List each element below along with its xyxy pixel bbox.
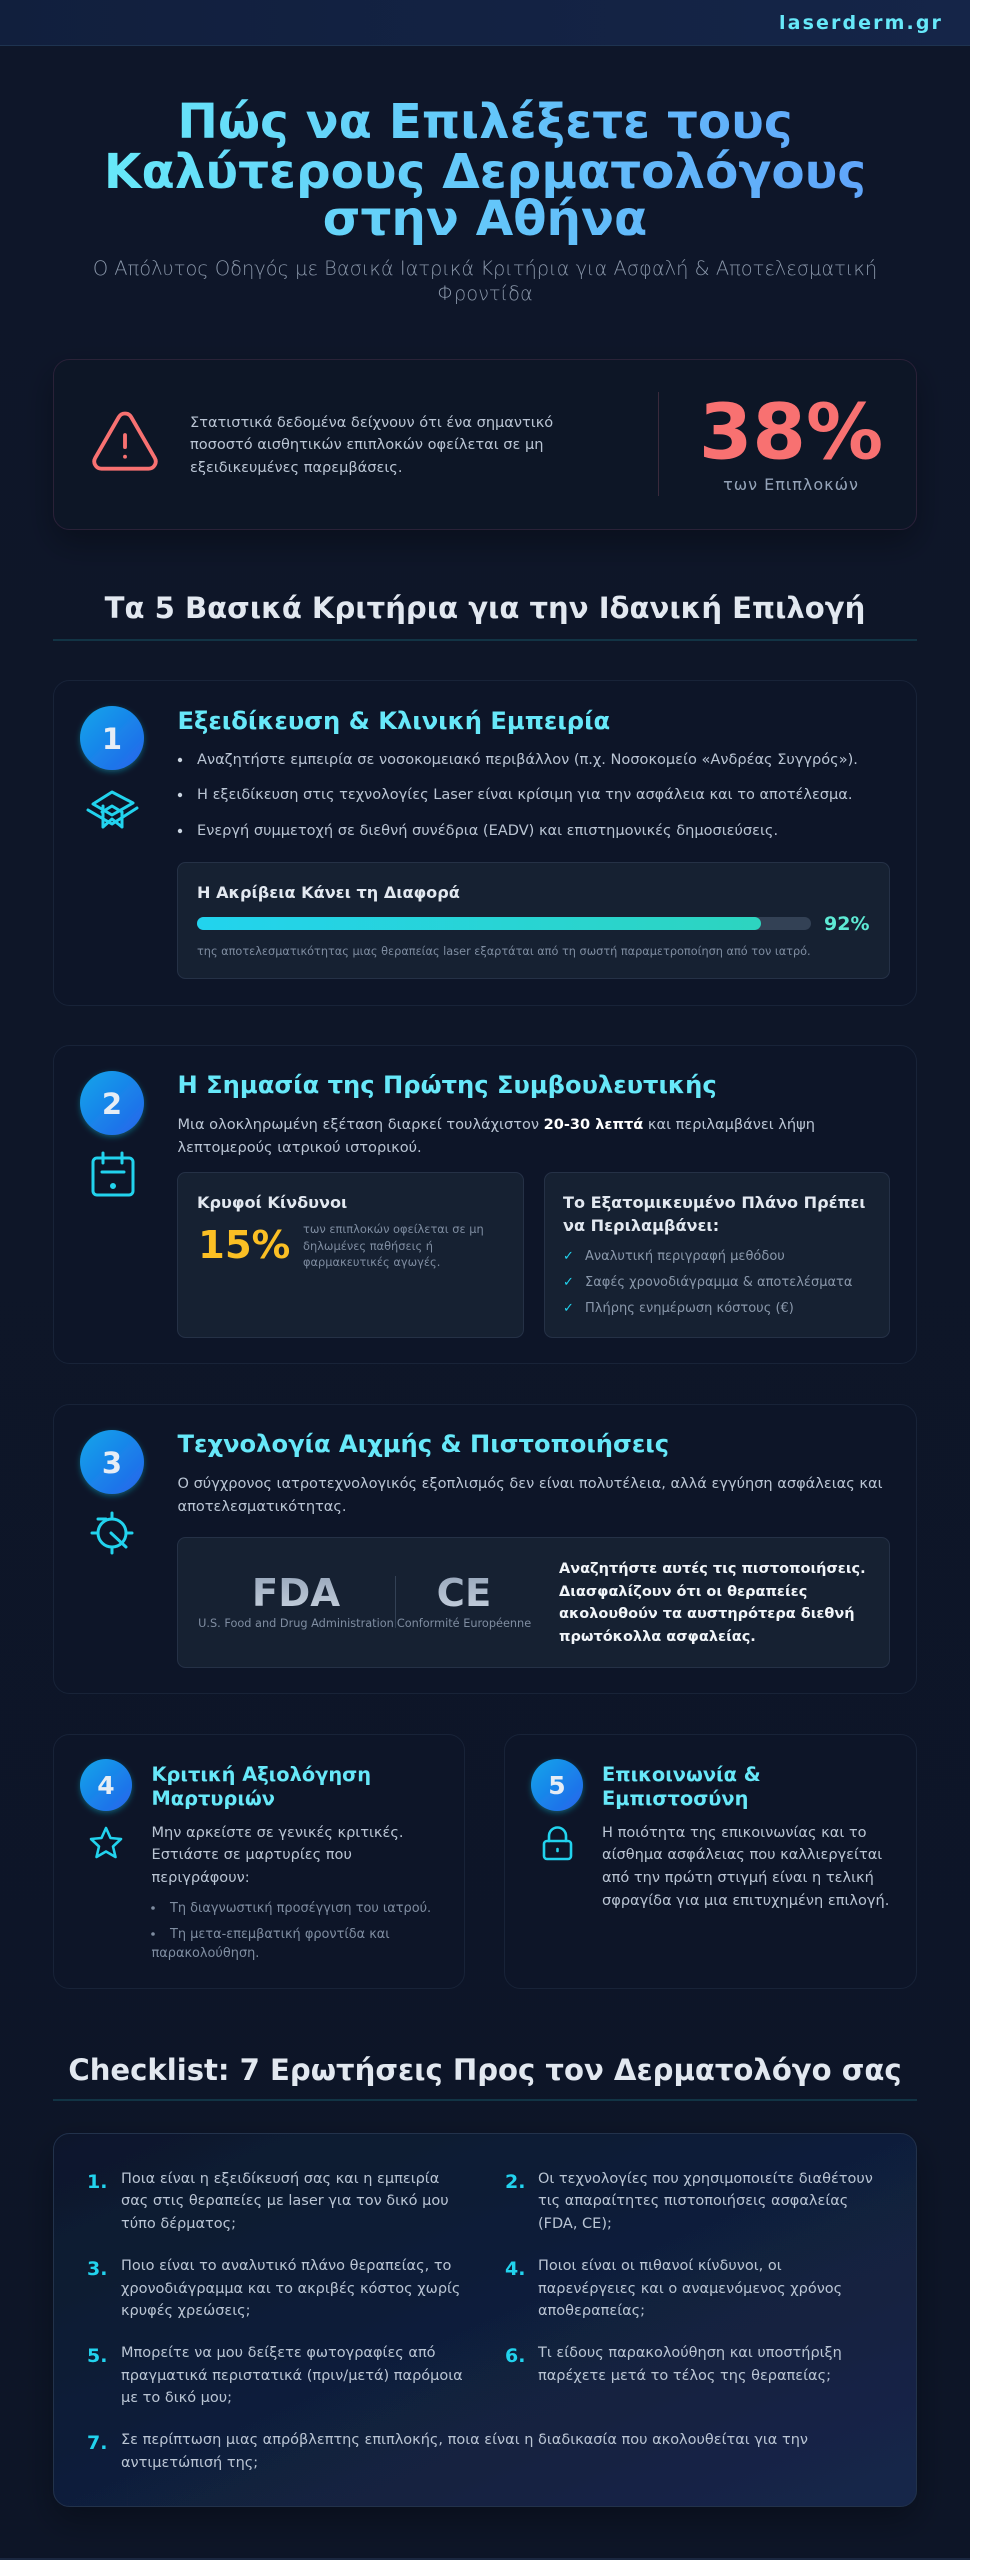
section heading: criteria: Τα 5 Βασικά Κριτήρια για την Ιδανική Επιλογή — [105, 591, 865, 625]
callout: personalised plan — [544, 1172, 890, 1338]
icon: calendar — [93, 1153, 133, 1195]
question 1: 1. — [87, 2171, 107, 2193]
body text: περιγράφουν: — [152, 1869, 250, 1886]
paragraph: Ο σύγχρονος ιατροτεχνολογικός εξοπλισμός δεν είναι πολυτέλεια, αλλά εγγύηση ασφάλειας και — [178, 1475, 883, 1492]
alert text: Στατιστικά δεδομένα δείχνουν ότι ένα σημαντικό — [190, 414, 553, 431]
panel: criterion 5 — [504, 1734, 916, 1988]
number badge 1: 1 — [102, 722, 122, 756]
bullet list: Ενεργή συμμετοχή σε διεθνή συνέδρια (EADV) και επιστημονικές δημοσιεύσεις. — [197, 822, 778, 839]
paragraph — [178, 1475, 883, 1515]
callout: hidden risks: 15% — [198, 1223, 290, 1268]
body text: από την πρώτη στιγμή είναι η τελική — [602, 1869, 874, 1886]
number badge 2: 2 — [102, 1087, 122, 1121]
panel: criterion 3 — [54, 1404, 916, 1694]
question 3: 3. — [87, 2258, 107, 2280]
certification note: Διασφαλίζουν ότι οι θεραπείες — [559, 1584, 807, 1600]
heading: Μαρτυριών — [152, 1787, 275, 1810]
heading: Κριτική Αξιολόγηση — [152, 1763, 371, 1786]
callout: personalised plan: Αναλυτική περιγραφή μεθόδου — [585, 1249, 785, 1264]
question 6 — [505, 2345, 842, 2384]
title — [104, 94, 866, 247]
stat caption: των Επιπλοκών — [723, 475, 859, 494]
panel: criterion 1 — [54, 680, 916, 1006]
question 6: Τι είδους παρακολούθηση και υποστήριξη — [537, 2345, 842, 2361]
number badge 3: 3 — [102, 1446, 122, 1480]
paragraph: Μια ολοκληρωμένη εξέταση διαρκεί τουλάχιστον 20-30 λεπτά και περιλαμβάνει λήψη — [178, 1116, 815, 1133]
callout: personalised plan: Πλήρης ενημέρωση κόστους (€) — [585, 1301, 794, 1316]
number badge 5 — [531, 1759, 583, 1811]
panel: alert statistic — [54, 360, 916, 530]
question 1: σας στις θεραπείες με laser για τον δικό μου — [121, 2193, 449, 2209]
subtitle — [93, 257, 877, 305]
question 2: (FDA, CE); — [538, 2216, 612, 2232]
heading: Επικοινωνία & — [602, 1763, 761, 1786]
bullet list — [178, 751, 858, 839]
question 2: τις απαραίτητες πιστοποιήσεις ασφαλείας — [538, 2193, 848, 2209]
CE badge: CE — [437, 1571, 491, 1616]
question 2: 2. — [505, 2171, 525, 2193]
question 4: παρενέργειες και ο αναμενόμενος χρόνος — [538, 2281, 842, 2297]
callout: personalised plan: ✓ — [563, 1301, 574, 1316]
number badge 5: 5 — [548, 1771, 566, 1800]
body text: αίσθημα ασφάλειας που καλλιεργείται — [602, 1846, 882, 1863]
heading: Η Σημασία της Πρώτης Συμβουλευτικής — [178, 1071, 717, 1099]
icon: graduation cap — [88, 792, 137, 827]
question 7 — [87, 2432, 808, 2471]
question 5: Μπορείτε να μου δείξετε φωτογραφίες από — [121, 2345, 436, 2361]
body text — [602, 1824, 889, 1909]
certification note: Αναζητήστε αυτές τις πιστοποιήσεις. — [559, 1561, 866, 1577]
heading — [152, 1763, 371, 1810]
callout: hidden risks: φαρμακευτικές αγωγές. — [303, 1255, 440, 1269]
paragraph — [178, 1116, 815, 1156]
number badge 3 — [80, 1430, 144, 1494]
subtitle: Ο Απόλυτος Οδηγός με Βασικά Ιατρικά Κριτήρια για Ασφαλή & Αποτελεσματική — [93, 257, 877, 280]
FDA badge: U.S. Food and Drug Administration — [198, 1617, 394, 1630]
icon: padlock — [544, 1828, 571, 1859]
sub-bullets: Τη μετα-επεμβατική φροντίδα και — [169, 1927, 390, 1942]
question 2 — [505, 2171, 873, 2232]
question 7: Σε περίπτωση μιας απρόβλεπτης επιπλοκής, ποια είναι η διαδικασία που ακολουθείται για την — [121, 2432, 808, 2448]
icon: crosshair gear — [92, 1513, 132, 1553]
callout: personalised plan: ✓ — [563, 1275, 574, 1290]
heading — [602, 1763, 761, 1810]
question 7: 7. — [87, 2432, 107, 2454]
question 1: Ποια είναι η εξειδίκευσή σας και η εμπειρία — [121, 2171, 439, 2187]
sub-bullets — [151, 1901, 431, 1961]
bullet list: Η εξειδίκευση στις τεχνολογίες Laser είναι κρίσιμη για την ασφάλεια και το αποτέλεσμα. — [197, 786, 852, 803]
sub-bullets: Τη διαγνωστική προσέγγιση του ιατρού. — [169, 1901, 431, 1916]
body text: Μην αρκείστε σε γενικές κριτικές. — [152, 1824, 404, 1841]
icon: star — [91, 1828, 121, 1857]
big number 38%: 38% — [699, 388, 883, 478]
bullet list: Αναζητήστε εμπειρία σε νοσοκομειακό περιβάλλον (π.χ. Νοσοκομείο «Ανδρέας Συγγρός»). — [197, 751, 858, 768]
section heading: checklist: Checklist: 7 Ερωτήσεις Προς τον Δερματολόγο σας — [68, 2053, 902, 2087]
callout: personalised plan: Σαφές χρονοδιάγραμμα & αποτελέσματα — [585, 1275, 852, 1290]
number badge 1 — [80, 706, 144, 770]
callout: precision progress bar: Η Ακρίβεια Κάνει τη Διαφορά — [197, 883, 460, 902]
question 5 — [87, 2345, 463, 2406]
alert text: εξειδικευμένες παρεμβάσεις. — [190, 459, 402, 476]
question 4: Ποιοι είναι οι πιθανοί κίνδυνοι, οι — [538, 2258, 782, 2274]
paragraph: λεπτομερούς ιατρικού ιστορικού. — [178, 1139, 422, 1156]
callout: hidden risks: των επιπλοκών οφείλεται σε μη — [303, 1222, 484, 1236]
number badge 4: 4 — [97, 1771, 115, 1800]
callout: precision progress bar: 92% — [824, 913, 869, 935]
callout: hidden risks: δηλωμένες παθήσεις ή — [303, 1239, 433, 1253]
header bar — [0, 0, 970, 46]
body text: σφραγίδα για μια επιτυχημένη επιλογή. — [602, 1892, 889, 1909]
number badge 4 — [80, 1759, 132, 1811]
paragraph: αποτελεσματικότητας. — [178, 1498, 347, 1515]
site name: laserderm.gr — [779, 12, 943, 34]
body text: Εστιάστε σε μαρτυρίες που — [152, 1846, 352, 1863]
alert text: ποσοστό αισθητικών επιπλοκών οφείλεται σε μη — [190, 436, 543, 453]
callout: personalised plan: Το Εξατομικευμένο Πλάνο Πρέπει — [563, 1193, 866, 1212]
FDA badge — [198, 1571, 394, 1630]
callout: precision progress bar: της αποτελεσματικότητας μιας θεραπείας laser εξαρτάται από τη σωστή παραμετροποίηση από τον ιατρό. — [197, 945, 811, 958]
certification note — [559, 1561, 866, 1645]
question 5: με το δικό μου; — [121, 2390, 232, 2406]
callout: personalised plan: να Περιλαμβάνει: — [563, 1216, 719, 1235]
callout: hidden risks — [178, 1172, 524, 1338]
icon: warning triangle — [94, 414, 156, 469]
question 4: αποθεραπείας; — [538, 2303, 645, 2319]
body text — [152, 1824, 404, 1886]
question 5: 5. — [87, 2345, 107, 2367]
certification note: πρωτόκολλα ασφαλείας. — [559, 1629, 756, 1645]
question 2: Οι τεχνολογίες που χρησιμοποιείτε διαθέτουν — [538, 2171, 873, 2187]
question 1 — [87, 2171, 449, 2232]
number badge 2 — [80, 1071, 144, 1135]
question 3: Ποιο είναι το αναλυτικό πλάνο θεραπείας, το — [121, 2258, 452, 2274]
heading: Εμπιστοσύνη — [602, 1787, 748, 1810]
question 6: 6. — [505, 2345, 525, 2367]
question 5: πραγματικά περιστατικά (πριν/μετά) παρόμοια — [121, 2368, 463, 2384]
certification note: ακολουθούν τα αυστηρότερα διεθνή — [559, 1606, 855, 1622]
callout: precision progress bar — [178, 862, 890, 978]
body text: Η ποιότητα της επικοινωνίας και το — [602, 1824, 867, 1841]
FDA badge: FDA — [252, 1571, 340, 1616]
sub-bullets: παρακολούθηση. — [152, 1946, 259, 1961]
panel: criterion 4 — [54, 1734, 464, 1988]
alert text — [190, 414, 553, 476]
heading: Εξειδίκευση & Κλινική Εμπειρία — [178, 707, 610, 735]
question 3 — [87, 2258, 460, 2319]
title: Πώς να Επιλέξετε τους — [177, 94, 793, 150]
question 3: κρυφές χρεώσεις; — [121, 2303, 251, 2319]
subtitle: Φροντίδα — [437, 282, 533, 305]
title: στην Αθήνα — [323, 191, 647, 247]
question 4: 4. — [505, 2258, 525, 2280]
CE badge: Conformité Européenne — [397, 1617, 531, 1630]
callout: personalised plan: ✓ — [563, 1249, 574, 1264]
question 1: τύπο δέρματος; — [121, 2216, 236, 2232]
panel: criterion 2 — [54, 1046, 916, 1364]
question 4 — [505, 2258, 842, 2319]
question 7: αντιμετώπισή της; — [121, 2455, 258, 2471]
question 3: χρονοδιάγραμμα και το ακριβές κόστος χωρίς — [121, 2281, 460, 2297]
title: Καλύτερους Δερματολόγους — [104, 144, 866, 200]
heading: Τεχνολογία Αιχμής & Πιστοποιήσεις — [178, 1430, 669, 1458]
question 6: παρέχετε μετά το τέλος της θεραπείας; — [538, 2368, 831, 2384]
panel: checklist — [54, 2134, 916, 2506]
CE badge — [397, 1571, 531, 1630]
callout: certifications — [178, 1538, 890, 1668]
callout: hidden risks: Κρυφοί Κίνδυνοι — [197, 1193, 347, 1212]
